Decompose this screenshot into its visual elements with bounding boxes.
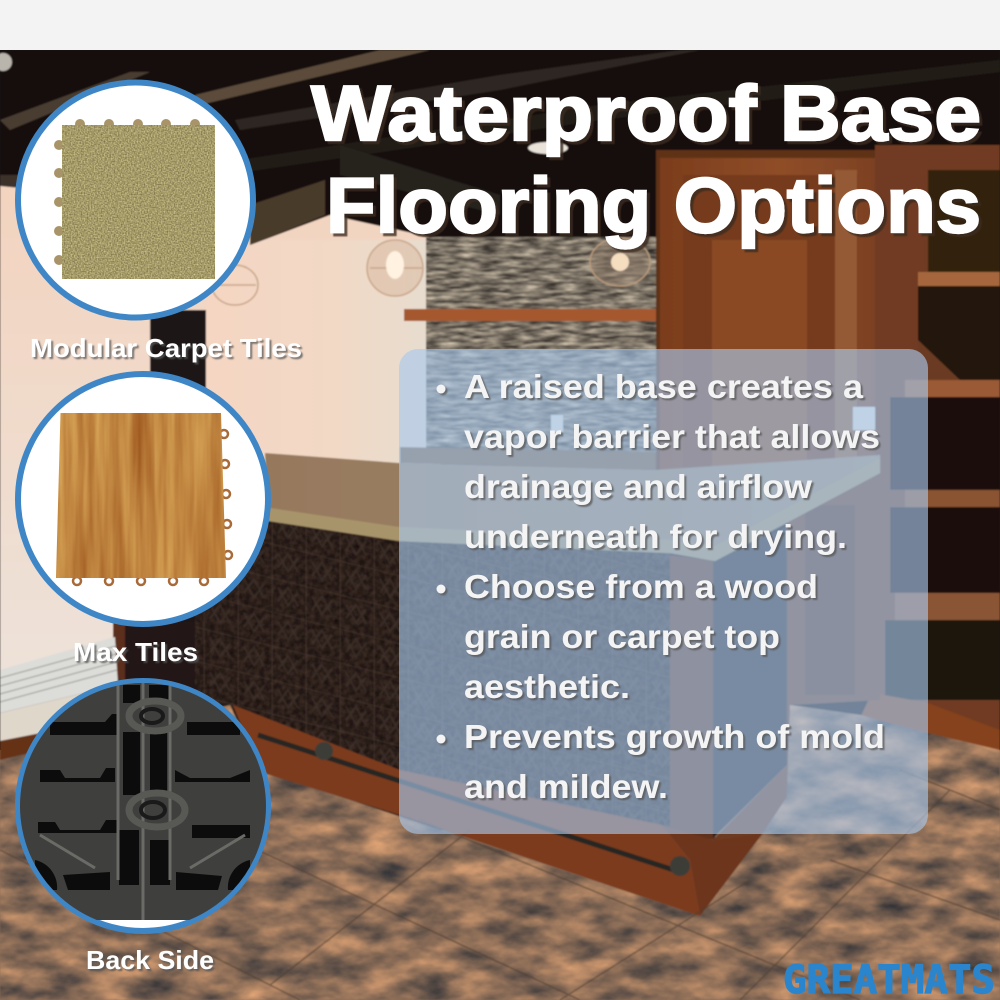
bullet list: and mildew. bbox=[464, 768, 668, 805]
title: Waterproof Base bbox=[311, 69, 981, 157]
panel: translucent benefits box bbox=[399, 349, 928, 834]
label: max tiles: Max Tiles bbox=[73, 637, 198, 667]
circle: back side of tile bbox=[15, 680, 275, 931]
circle: modular carpet tile bbox=[18, 82, 253, 318]
title: Flooring Options bbox=[326, 161, 981, 249]
icon: connector ring bottom bbox=[129, 793, 185, 827]
bullet list: aesthetic. bbox=[464, 668, 630, 705]
bullet list bbox=[436, 368, 885, 805]
label: modular carpet tiles: Modular Carpet Tiles bbox=[30, 333, 302, 363]
top margin strip bbox=[0, 0, 1000, 50]
bullet list: Prevents growth of mold bbox=[464, 718, 885, 755]
bar front bbox=[195, 515, 670, 830]
bullet list: drainage and airflow bbox=[464, 468, 812, 505]
bullet list: Choose from a wood bbox=[464, 568, 818, 605]
wood base bbox=[233, 705, 700, 916]
bullet list: A raised base creates a bbox=[464, 368, 864, 405]
icon: wood grain tile surface bbox=[56, 413, 226, 578]
icon: carpet tile surface bbox=[62, 125, 215, 279]
icon: carpet tile connector tabs bbox=[54, 119, 200, 265]
circle: max tile bbox=[18, 374, 268, 624]
bullet list: grain or carpet top bbox=[464, 618, 780, 655]
title bbox=[311, 69, 981, 249]
icon: connector ring top bbox=[129, 701, 181, 731]
countertop bbox=[400, 447, 656, 470]
label: back side: Back Side bbox=[86, 945, 214, 975]
bullet list: underneath for drying. bbox=[464, 518, 847, 555]
icon: max tile connector loops bbox=[73, 430, 232, 585]
bullet list: vapor barrier that allows bbox=[464, 418, 880, 455]
